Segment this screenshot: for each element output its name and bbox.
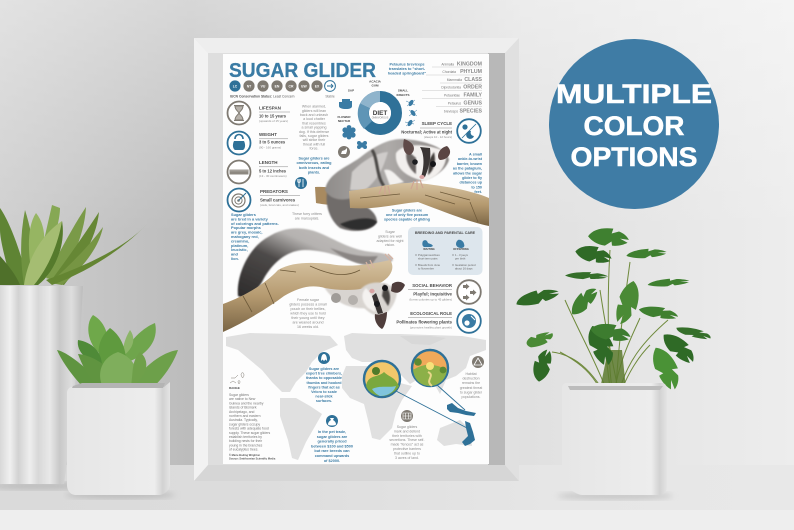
taxonomy list: SPECIES [460, 108, 483, 114]
ecological role [396, 309, 481, 333]
text: pouch: which they use to hold [290, 312, 326, 316]
icon: fork and knife [295, 177, 307, 189]
text: pouch: gliders possess a small [289, 302, 327, 306]
tail [327, 180, 377, 231]
panel: breeding and parental care: Polygamous/lives [418, 253, 440, 257]
text: colour morphs: creamino, [231, 238, 249, 243]
taxonomy list: Mammalia [447, 78, 462, 82]
diet labels and icons [338, 80, 417, 158]
text: omnivorous: plants. [308, 171, 320, 175]
taxonomy list: Petaurus [448, 102, 461, 106]
upside-down head [359, 282, 397, 316]
callout: habitat threat [460, 356, 484, 399]
range text block: RANGE [229, 386, 240, 390]
upper paw [366, 254, 393, 270]
callout: pet trade [311, 415, 353, 463]
lifespan stat: LIFESPAN [259, 106, 281, 110]
icon: insect group [405, 99, 417, 127]
body [325, 139, 449, 199]
diet labels and icons: ACACIA [369, 80, 382, 84]
taxonomy list: Diprotodontia [441, 86, 461, 90]
text: patagium: barrier, known [457, 162, 483, 166]
text: patagium [453, 152, 483, 194]
text: colour morphs: lion. [231, 256, 239, 261]
text: gliding species: one of only five possum [386, 213, 429, 217]
text: gliding species [384, 208, 430, 222]
text: alarm behaviour: that resembles [302, 121, 326, 125]
text: colour morphs: platinum, [231, 243, 248, 248]
diet donut chart [363, 96, 396, 130]
pot body [562, 383, 667, 495]
range text block: Source: Smithsonian Scientific Media [229, 456, 276, 460]
callout: pet trade: sugar gliders are [317, 435, 347, 439]
length stat: 5 to 12 inches [259, 168, 287, 174]
ecological role: Pollinates flowering plants [396, 320, 453, 324]
callout: climbing: thanks to opposable [306, 376, 342, 380]
panel: breeding and parental care [408, 227, 482, 275]
IUCN conservation status scale: EN [275, 84, 280, 88]
text: pouch: Female sugar [297, 298, 320, 302]
text: sleep cycle [401, 121, 453, 139]
predators stat: PREDATORS [260, 189, 288, 194]
range text block: establish territories by [229, 435, 262, 439]
taxonomy list [422, 62, 483, 114]
ecological role: (promotes healthy plant growth) [410, 326, 452, 330]
icon: offspring [456, 240, 464, 248]
panel: breeding and parental care: to November [418, 266, 434, 270]
text: night vision: Sugar [385, 230, 396, 234]
social behavior: Playful; Inquisitive [413, 292, 453, 296]
diet labels and icons: NECTAR [338, 119, 351, 123]
text: patagium: glider to fly [462, 176, 483, 180]
text: alarm behaviour: threat with full [303, 142, 325, 146]
badge: multiple color options: OPTIONS [570, 142, 698, 172]
predators stat: (owls, feral cats, and snakes) [260, 203, 299, 207]
succulent leaves [57, 315, 178, 389]
head [396, 145, 446, 181]
small square pot with succulent [57, 315, 178, 499]
panel: breeding and parental care: OFFSPRING [453, 247, 469, 251]
stems [552, 250, 668, 389]
panel: breeding and parental care: Breeds from June [418, 263, 441, 267]
branch [223, 260, 392, 332]
callout: pet trade: command upwards [315, 454, 349, 458]
text: night vision: adapted for night [377, 239, 403, 243]
callout: climbing: surfaces. [316, 399, 332, 403]
text: alarm behaviour: force. [310, 147, 318, 151]
text: pouch [289, 298, 327, 329]
text: sleep cycle: (sleeps 10 - 12 hours) [424, 135, 452, 139]
text: night vision: vision. [385, 243, 395, 247]
text: omnivorous: Sugar gliders are [298, 156, 330, 160]
IUCN conservation status scale: VU [261, 84, 266, 88]
predators stat [228, 188, 300, 212]
weight stat: WEIGHT [259, 132, 277, 137]
badge: multiple color options: MULTIPLE [556, 79, 712, 109]
text: colour morphs: of colorings and patterns. [231, 221, 279, 226]
branch behind [315, 187, 352, 208]
range text block: are native to New [229, 397, 256, 401]
range text block: northern and eastern [229, 414, 261, 418]
taxonomy list: Chordata [442, 70, 456, 74]
IUCN conservation status scale: EX [315, 84, 320, 88]
panel: breeding and parental care: WAITING [423, 247, 435, 251]
IUCN conservation status scale: LC [233, 84, 238, 88]
callout: territory: their territories with [392, 434, 422, 438]
social behavior: SOCIAL BEHAVIOR [412, 283, 453, 288]
diet labels and icons: FLOWER [338, 115, 351, 119]
callout: habitat threat: Habitat [465, 372, 477, 376]
front paws [379, 180, 423, 195]
text: omnivorous [296, 156, 332, 175]
taxonomy list: ORDER [463, 85, 482, 91]
text: marsupials: These furry critters [292, 212, 322, 216]
callout: habitat threat: populations. [462, 395, 480, 399]
callout: territory [389, 410, 425, 460]
text: pouch: 16 weeks old. [297, 325, 319, 329]
text: alarm behaviour: will strike their [303, 138, 326, 142]
callout: territory: Sugar gliders [397, 425, 418, 429]
callout: climbing: expert tree climbers, [306, 372, 342, 376]
diet donut chart: OMNIVOROUS [372, 117, 389, 120]
callout: climbing: fingers that act as [308, 385, 340, 389]
text: omnivorous: both insects and [299, 166, 330, 170]
text: gliding species: Sugar gliders are [392, 208, 422, 212]
text: colour morphs: Popular morphs [231, 225, 261, 230]
icon: range map [230, 373, 244, 384]
text: omnivorous: omnivorous, eating [296, 161, 332, 165]
icon: sun and moon badge [457, 119, 481, 143]
panel: breeding and parental care: per birth [455, 256, 466, 260]
text: patagium: A small [469, 152, 482, 156]
callout: pet trade: of $2000. [324, 459, 340, 463]
range text block: sugar gliders occupy [229, 422, 260, 426]
text: alarm behaviour: gliders will lean [302, 109, 326, 113]
social behavior: (forms colonies up to 45 gliders) [409, 298, 452, 302]
icon: sap [339, 99, 352, 109]
social behavior [408, 280, 481, 304]
title: SUGAR GLIDER [229, 59, 376, 82]
callout: climbing [306, 352, 342, 403]
callout: habitat threat: greatest threat [460, 386, 482, 390]
range text block: young in the branches [229, 443, 263, 447]
taxonomy list: FAMILY [463, 92, 483, 98]
callout: pet trade: between $100 and $500 [311, 444, 353, 448]
callout: territory: protective barriers [393, 447, 421, 451]
text: colour morphs: mahogany red, [231, 234, 259, 239]
callout: habitat threat: to sugar glider [460, 390, 483, 394]
IUCN conservation status scale: NT [247, 84, 252, 88]
callout: habitat threat: remains the [462, 381, 480, 385]
range text block: Archipelago, and [229, 410, 255, 414]
text: marsupials [292, 212, 322, 220]
IUCN conservation status scale: CR [289, 84, 294, 88]
callout: pet trade: In the pet trade, [318, 430, 346, 434]
text: night vision: gliders are well [378, 234, 402, 238]
spiky leaves [0, 205, 147, 285]
vase shadow [0, 482, 90, 490]
stem cluster at base [600, 350, 626, 389]
diet labels and icons: GUM [372, 84, 379, 88]
callout: pet trade: generally priced [317, 440, 347, 444]
badge: multiple color options [549, 39, 719, 209]
text: alarm behaviour: a small yapping [302, 126, 326, 130]
picture frame [194, 38, 519, 481]
IUCN conservation status scale [229, 80, 335, 98]
callout: climbing: Velcro to scale [311, 390, 337, 394]
callout: pet trade: but rare breeds can [314, 449, 350, 453]
callout: territory: that outline up to [394, 451, 420, 455]
text: Petaurus breviceps meaning: translates to "short- [389, 67, 426, 71]
text: Petaurus breviceps meaning: Petaurus breviceps [389, 62, 425, 66]
text: patagium: ankle-to-wrist [458, 157, 483, 161]
callout: territory: made "fences" act as [391, 443, 424, 447]
panel: breeding and parental care: Gestation period [455, 263, 476, 267]
text: patagium: to 150 [471, 185, 482, 189]
photo: sugar glider on upper branch [315, 139, 489, 231]
IUCN conservation status scale: EW [301, 84, 308, 88]
taxonomy list: Animalia [441, 62, 454, 66]
weight stat: (90 - 160 grams) [259, 146, 281, 150]
text: alarm behaviour: dog. If this defense [299, 130, 329, 134]
belly below branch [322, 280, 388, 308]
right square pot with monstera [511, 225, 717, 500]
range text block: Guinea and the nearby [229, 401, 264, 405]
text: alarm behaviour: When alarmed, [302, 104, 326, 108]
text: alarm behaviour: a loud chatter [303, 117, 326, 121]
lifespan stat: (upwards of 15 years) [259, 119, 288, 123]
range text block: of eucalyptus trees. [229, 448, 258, 452]
branch [349, 183, 489, 226]
monstera leaves [511, 225, 717, 393]
connector lines [396, 385, 467, 428]
vase body [0, 286, 83, 484]
text: colour morphs: Sugar gliders [231, 212, 256, 217]
text: patagium: feet. [474, 190, 482, 194]
lifespan stat: 10 to 15 years [259, 114, 287, 118]
panel: breeding and parental care: about 16 days [455, 266, 473, 270]
range text block: © Marie Boding Wrighton [229, 453, 261, 457]
range text block: Australia. Typically, [229, 418, 258, 422]
length stat: LENGTH [259, 160, 278, 165]
text: colour morphs [231, 212, 279, 261]
text: patagium: allows the sugar [453, 171, 483, 175]
panel: breeding and parental care: BREEDING AND PARENTAL CARE [415, 231, 476, 235]
diet labels and icons: SAP [348, 88, 354, 92]
text: patagium: as the patagium, [453, 167, 482, 171]
callout: climbing: near-slick [315, 395, 334, 399]
text: colour morphs: are grey, mosaic, [231, 230, 263, 235]
icon: flower [342, 125, 356, 139]
text: pouch: pouch on their bellies, [291, 307, 325, 311]
world map [226, 333, 486, 460]
text: pouch: their young until they [291, 316, 325, 320]
text: Petaurus breviceps meaning: headed springboard" [388, 72, 426, 76]
taxonomy list: breviceps [444, 110, 458, 114]
icon circle: sunset savanna habitat [412, 350, 448, 386]
range text block [229, 373, 276, 460]
predators stat: Small carnivores [260, 198, 296, 202]
ecological role: ECOLOGICAL ROLE [410, 311, 452, 316]
text: night vision [377, 230, 403, 247]
panel: breeding and parental care: short-term pairs [418, 256, 438, 260]
taxonomy list: Petauridae [444, 94, 460, 98]
range text block: islands of Bismark [229, 406, 257, 410]
text: colour morphs: and [231, 252, 239, 257]
text: patagium: distances up [459, 181, 483, 185]
text: marsupials: are marsupials. [295, 216, 319, 220]
range text block: forests with adequate food [229, 427, 269, 431]
photo: sugar glider on lower branch [223, 228, 405, 332]
callout: habitat threat: destruction [462, 377, 480, 381]
taxonomy list: GENUS [464, 100, 483, 106]
taxonomy list: KINGDOM [457, 62, 482, 68]
diet donut chart: DIET [373, 110, 387, 117]
weight stat [228, 132, 288, 154]
length stat: (13 - 30 centimeters) [259, 174, 287, 178]
IUCN conservation status scale: IUCN Conservation Status: Least Concern [230, 94, 295, 98]
text: Petaurus breviceps meaning [388, 62, 426, 76]
poster [223, 54, 489, 464]
icon: waiting [422, 240, 433, 247]
text: colour morphs: leucistic, [231, 247, 248, 252]
tail and body [238, 228, 393, 297]
text: alarm behaviour: back and unleash [300, 113, 328, 117]
callout: territory: mark and defend [394, 429, 420, 433]
text: sleep cycle: Nocturnal; Active at night [401, 130, 453, 134]
text: pouch: are weaned around [293, 320, 323, 324]
range text block: Sugar gliders [229, 393, 249, 397]
text: alarm behaviour [299, 104, 329, 151]
weight stat: 3 to 5 ounces [259, 140, 286, 144]
text: colour morphs: are bred in a variety [231, 216, 269, 221]
text: alarm behaviour: fails, sugar gliders [300, 134, 329, 138]
lifespan stat [228, 102, 290, 124]
callout: territory: secretions. These self- [389, 438, 425, 442]
panel: breeding and parental care: 1 - 3 joeys [455, 253, 469, 257]
diet labels and icons: INSECTS [396, 93, 410, 97]
callout: climbing: Sugar gliders are [309, 367, 339, 371]
length stat [228, 160, 288, 184]
icon circle: forest stream habitat [364, 361, 400, 397]
diet labels and icons: SMALL [398, 88, 408, 92]
taxonomy list: CLASS [464, 77, 483, 83]
text: sleep cycle: SLEEP CYCLE [422, 121, 452, 126]
taxonomy list: PHYLUM [460, 69, 482, 75]
callout: climbing: thumbs and hooked [306, 381, 342, 385]
badge: multiple color options: COLOR [584, 111, 684, 141]
range highlighted on map [447, 403, 476, 446]
IUCN conservation status scale: Stable [325, 94, 335, 98]
left tall vase with spiky plant [0, 205, 147, 490]
text: gliding species: species capable of gliding [384, 218, 430, 222]
icon: flower two [357, 141, 367, 149]
range text block: supply. These sugar gliders [229, 431, 270, 435]
pot body [67, 382, 170, 495]
range text block: building nests for their [229, 439, 263, 443]
callout: territory: 3 acres of land. [395, 456, 419, 460]
icon: sugar glider badge [338, 146, 350, 158]
